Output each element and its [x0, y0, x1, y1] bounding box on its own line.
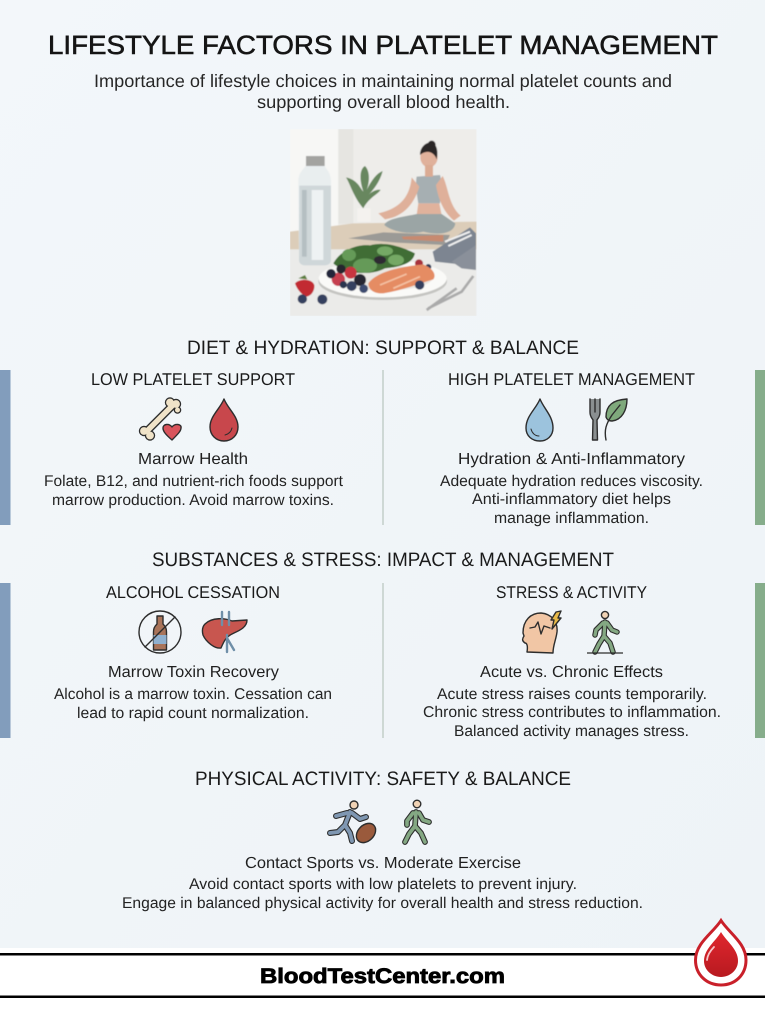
- illustration: water bottle, salad with salmon, woman meditating, sneakers: [290, 129, 477, 316]
- body text: Balanced activity manages stress.: [454, 723, 689, 740]
- title: LIFESTYLE FACTORS IN PLATELET MANAGEMENT: [48, 30, 718, 60]
- body text: [440, 473, 703, 527]
- accent bar right: [755, 370, 765, 525]
- icon: liver: [202, 612, 247, 652]
- icon: runner with football: [330, 801, 379, 846]
- icon: bone with heart: [139, 397, 181, 441]
- subtitle: supporting overall blood health.: [257, 92, 510, 112]
- panel heading: HIGH PLATELET MANAGEMENT: [448, 370, 695, 389]
- subheading: Marrow Toxin Recovery: [108, 664, 279, 681]
- panel: high platelet management: [440, 370, 703, 527]
- panel heading: LOW PLATELET SUPPORT: [91, 370, 295, 389]
- accent bar left: [0, 370, 10, 525]
- body text: Avoid contact sports with low platelets to prevent injury.: [189, 876, 577, 893]
- subtitle: Importance of lifestyle choices in maintaining normal platelet counts and: [94, 71, 672, 91]
- body text: Folate, B12, and nutrient-rich foods support: [44, 473, 344, 490]
- body text: Alcohol is a marrow toxin. Cessation can: [54, 686, 332, 703]
- subheading: Contact Sports vs. Moderate Exercise: [245, 855, 521, 872]
- footer brand text: BloodTestCenter.com: [260, 965, 505, 988]
- subheading: Marrow Health: [138, 451, 248, 468]
- section heading: substances and stress: SUBSTANCES & STRESS: IMPACT & MANAGEMENT: [152, 549, 614, 571]
- body text: [122, 876, 643, 912]
- icon: walking person: [587, 611, 623, 653]
- icon: blood drop: [210, 399, 238, 441]
- subheading: Hydration & Anti-Inflammatory: [458, 451, 685, 468]
- icon: head with stress bolt: [523, 611, 561, 653]
- body text: Chronic stress contributes to inflammation.: [423, 704, 721, 721]
- panel: alcohol cessation: [54, 583, 332, 722]
- panel heading: STRESS & ACTIVITY: [496, 583, 647, 602]
- icon: crossed-out bottle: [139, 611, 181, 653]
- subtitle: [94, 71, 672, 112]
- panel: stress and activity: [423, 583, 721, 740]
- accent bar left: [0, 583, 10, 738]
- body text: manage inflammation.: [494, 510, 649, 527]
- body text: [423, 686, 721, 740]
- icon: blood drop logo: [696, 920, 746, 985]
- body text: [44, 473, 344, 509]
- body text: marrow production. Avoid marrow toxins.: [52, 492, 334, 509]
- body text: lead to rapid count normalization.: [77, 705, 309, 722]
- panel heading: ALCOHOL CESSATION: [106, 583, 280, 602]
- body text: Engage in balanced physical activity for overall health and stress reduction.: [122, 895, 643, 912]
- body text: Adequate hydration reduces viscosity.: [440, 473, 703, 490]
- icon: walking person: [405, 800, 429, 842]
- icon: fork and leaf: [590, 399, 627, 440]
- body text: [54, 686, 332, 722]
- section heading: physical activity: PHYSICAL ACTIVITY: SAFETY & BALANCE: [195, 768, 571, 790]
- footer: [0, 920, 765, 1024]
- body text: Acute stress raises counts temporarily.: [437, 686, 707, 703]
- accent bar right: [755, 583, 765, 738]
- subheading: Acute vs. Chronic Effects: [480, 664, 663, 681]
- panel: low platelet support: [44, 370, 344, 509]
- panel: physical activity: [122, 768, 643, 912]
- icon: water drop: [526, 399, 553, 441]
- section heading: diet and hydration: DIET & HYDRATION: SUPPORT & BALANCE: [187, 337, 579, 359]
- body text: Anti-inflammatory diet helps: [472, 491, 671, 508]
